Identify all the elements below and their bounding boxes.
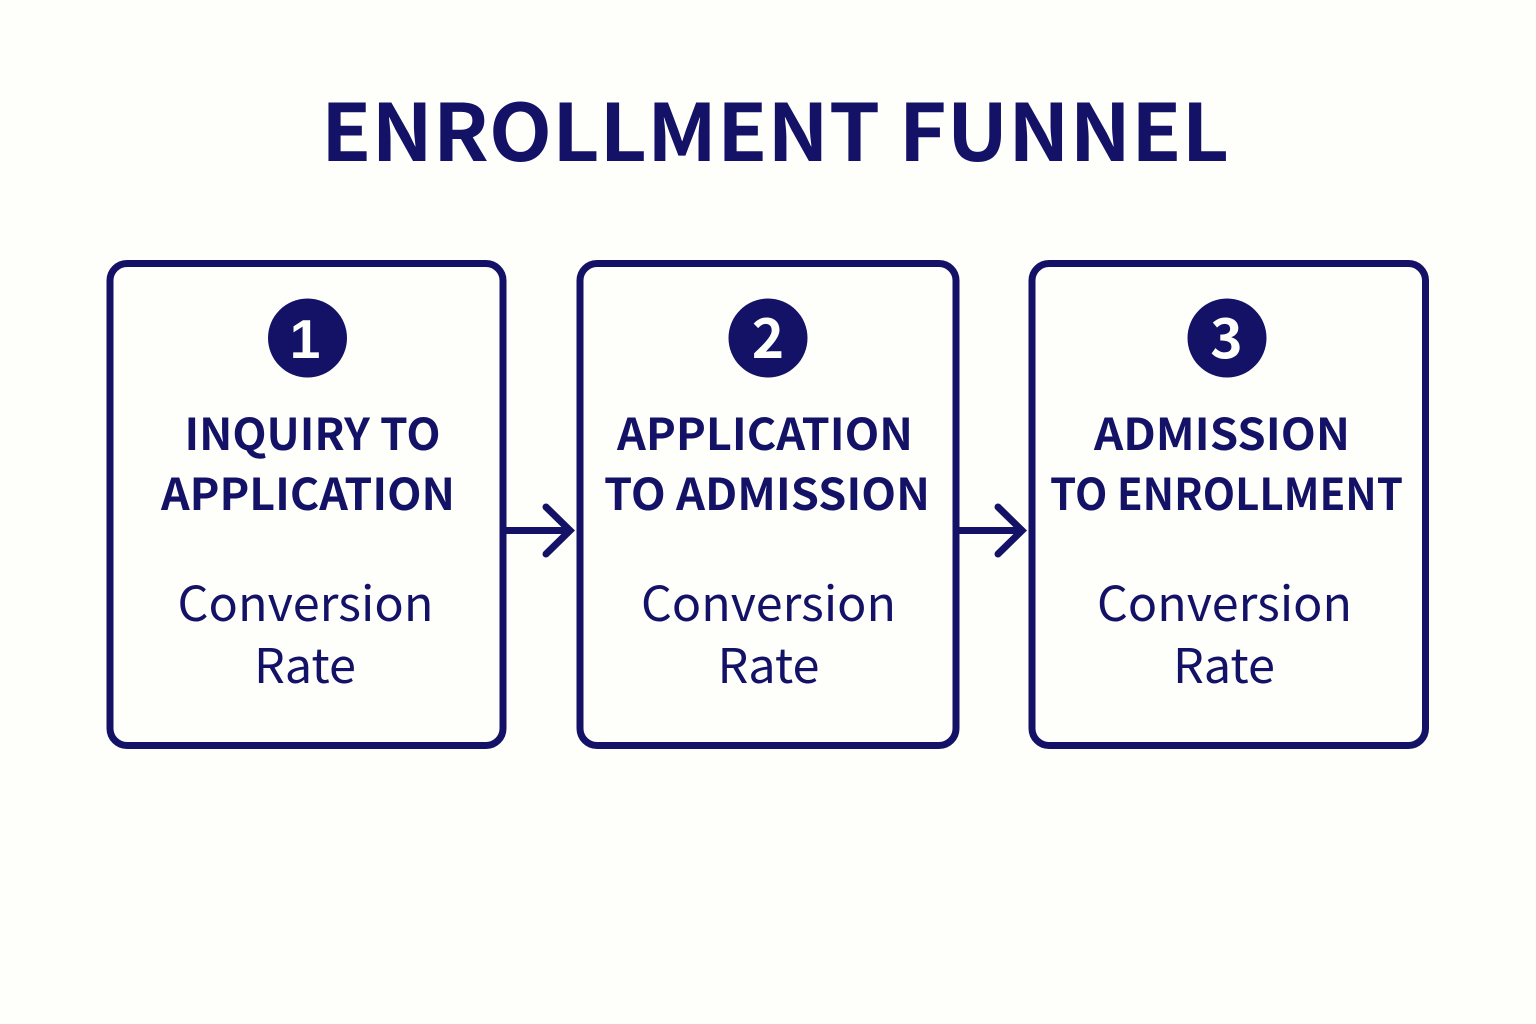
heading: application to admission: APPLICATION [616, 399, 913, 463]
text: conversion rate: Conversion [1097, 565, 1352, 635]
heading: admission to enrollment: TO ENROLLMENT [1050, 459, 1403, 523]
arrow: step 2 to step 3 [956, 507, 1022, 554]
icon: number 3 [1188, 294, 1266, 378]
text: conversion rate: Rate [1173, 627, 1275, 697]
icon: number 1 [268, 298, 347, 378]
heading: inquiry to application: APPLICATION [160, 459, 455, 523]
heading: inquiry to application: INQUIRY TO [184, 399, 440, 463]
heading: admission to enrollment: ADMISSION [1093, 399, 1350, 463]
icon: number 2: 2 [752, 294, 784, 374]
heading: application to admission [604, 399, 930, 523]
icon: number 2 [728, 294, 808, 378]
text: conversion rate [178, 565, 434, 697]
text: conversion rate: Rate [254, 627, 356, 697]
heading: admission to enrollment [1050, 399, 1403, 523]
text: conversion rate: Conversion [641, 565, 896, 635]
text: conversion rate [641, 565, 896, 697]
text: conversion rate: Conversion [178, 565, 434, 635]
text: conversion rate: Rate [718, 627, 820, 697]
panel: step 2 [580, 264, 956, 746]
text: conversion rate [1097, 565, 1352, 697]
panel: step 3 [1032, 264, 1426, 746]
heading: inquiry to application [160, 399, 455, 523]
icon: number 1: 1 [290, 308, 320, 370]
icon: number 3: 3 [1210, 294, 1243, 374]
title: ENROLLMENT FUNNEL [321, 69, 1229, 184]
arrow: step 1 to step 2 [503, 507, 570, 554]
panel: step 1 [110, 264, 503, 746]
heading: application to admission: TO ADMISSION [604, 459, 930, 523]
